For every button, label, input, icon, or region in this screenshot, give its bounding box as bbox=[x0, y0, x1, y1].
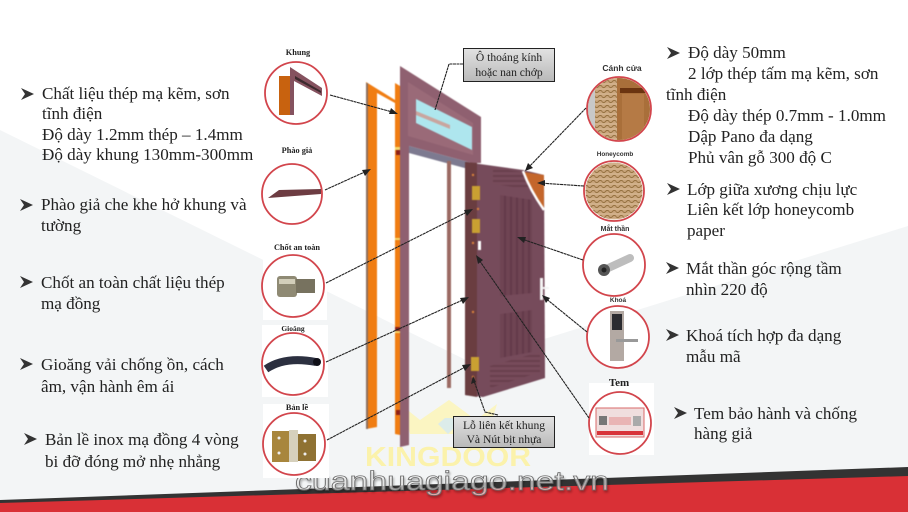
detail: Khoá bbox=[587, 297, 649, 368]
door leaf bbox=[465, 162, 549, 397]
left text 1 bbox=[21, 84, 254, 164]
left text 3: mạ đồng bbox=[41, 294, 101, 313]
right text 2: paper bbox=[687, 221, 725, 240]
detail: Khung: Khung bbox=[286, 48, 311, 57]
inner orange post bbox=[395, 83, 400, 435]
left text 2: tường bbox=[41, 216, 82, 235]
watermark logo: KingDoor: KINGDOOR bbox=[365, 441, 531, 472]
transom glass bbox=[416, 99, 472, 150]
right text 1: Độ dày thép 0.7mm - 1.0mm bbox=[688, 106, 887, 125]
handle bbox=[540, 278, 543, 300]
right text 1: tĩnh điện bbox=[666, 85, 727, 104]
detail: Khoá: Khoá bbox=[610, 297, 627, 304]
detail: Mắt thần: Mắt thần bbox=[601, 224, 629, 233]
detail: Cánh cửa: Cánh cửa bbox=[602, 63, 642, 73]
left text 1: Chất liệu thép mạ kẽm, sơn bbox=[42, 84, 230, 103]
outer orange frame bbox=[366, 82, 395, 429]
pink frame with transom bbox=[400, 66, 481, 447]
detail: Honeycomb bbox=[584, 151, 644, 221]
right text 1 bbox=[666, 43, 887, 167]
left text 2: Phào giả che khe hở khung và bbox=[41, 195, 247, 214]
left text 4: âm, vận hành êm ái bbox=[41, 377, 175, 396]
detail: Mắt thần bbox=[583, 224, 645, 296]
right text 2: Liên kết lớp honeycomb bbox=[687, 200, 854, 219]
watermark logo: KingDoor bbox=[365, 400, 531, 472]
left text 5: bi đỡ đóng mở nhẹ nhẳng bbox=[45, 452, 221, 471]
callout: transom: hoặc nan chớp bbox=[475, 66, 543, 79]
left text 1: Độ dày 1.2mm thép – 1.4mm bbox=[42, 125, 244, 144]
detail: Chốt an toàn bbox=[262, 243, 327, 320]
left text 2 bbox=[20, 195, 247, 235]
latch slot bbox=[478, 241, 481, 250]
watermark url: cuanhuagiago.net.vn bbox=[295, 466, 609, 496]
right text 5: Tem bảo hành và chống bbox=[694, 404, 857, 423]
leader arrows bbox=[325, 95, 589, 440]
right text 3 bbox=[666, 259, 842, 299]
detail: Khung bbox=[265, 48, 327, 124]
right text 1: Dập Pano đa dạng bbox=[688, 127, 813, 146]
callout: transom bbox=[435, 48, 554, 110]
door frame illustration bbox=[366, 66, 549, 447]
detail: Tem: Tem bbox=[609, 377, 629, 389]
callout: connection holes: Và Nút bịt nhựa bbox=[467, 433, 541, 446]
right text 1: 2 lớp thép tấm mạ kẽm, sơn bbox=[688, 64, 879, 83]
screw dots bbox=[472, 174, 474, 176]
detail: Chốt an toàn: Chốt an toàn bbox=[274, 243, 320, 252]
left text 5 bbox=[24, 430, 239, 471]
hinges bbox=[472, 186, 480, 200]
detail: Gioăng bbox=[262, 324, 328, 397]
detail: Tem bbox=[589, 377, 654, 455]
left text 4: Gioăng vải chống ồn, cách bbox=[41, 355, 224, 374]
bottom band bbox=[0, 467, 908, 512]
detail: Bản lề: Bản lề bbox=[286, 403, 308, 412]
right text 3: Mắt thần góc rộng tầm bbox=[686, 259, 842, 278]
right text 5: hàng giả bbox=[694, 424, 753, 443]
left text 5: Bản lề inox mạ đồng 4 vòng bbox=[45, 430, 239, 449]
right text 4: mẫu mã bbox=[686, 347, 741, 366]
right text 5 bbox=[674, 404, 857, 443]
left text 1: Độ dày khung 130mm-300mm bbox=[42, 145, 254, 164]
detail: Honeycomb: Honeycomb bbox=[597, 151, 633, 158]
right text 4 bbox=[666, 326, 842, 366]
left text 1: tĩnh điện bbox=[42, 104, 103, 123]
left text 3 bbox=[20, 273, 225, 313]
cut-away corner bbox=[524, 172, 544, 210]
detail: Phào giả bbox=[262, 146, 322, 224]
right text 1: Độ dày 50mm bbox=[688, 43, 787, 62]
callout: connection holes: Lỗ liên kết khung bbox=[463, 419, 545, 432]
right text 2: Lớp giữa xương chịu lực bbox=[687, 180, 858, 199]
callout: transom: Ô thoáng kính bbox=[476, 50, 542, 64]
right text 1: Phủ vân gỗ 300 độ C bbox=[688, 148, 832, 167]
right text 4: Khoá tích hợp đa dạng bbox=[686, 326, 842, 345]
callout: connection holes bbox=[454, 376, 554, 448]
right text 3: nhìn 220 độ bbox=[686, 280, 768, 299]
detail: Cánh cửa bbox=[587, 63, 651, 141]
detail: Bản lề bbox=[263, 403, 329, 478]
detail: Gioăng: Gioăng bbox=[281, 324, 305, 333]
right text 2 bbox=[667, 180, 858, 240]
left text 4 bbox=[20, 355, 224, 396]
detail: Phào giả: Phào giả bbox=[282, 146, 313, 155]
left text 3: Chốt an toàn chất liệu thép bbox=[41, 273, 225, 292]
